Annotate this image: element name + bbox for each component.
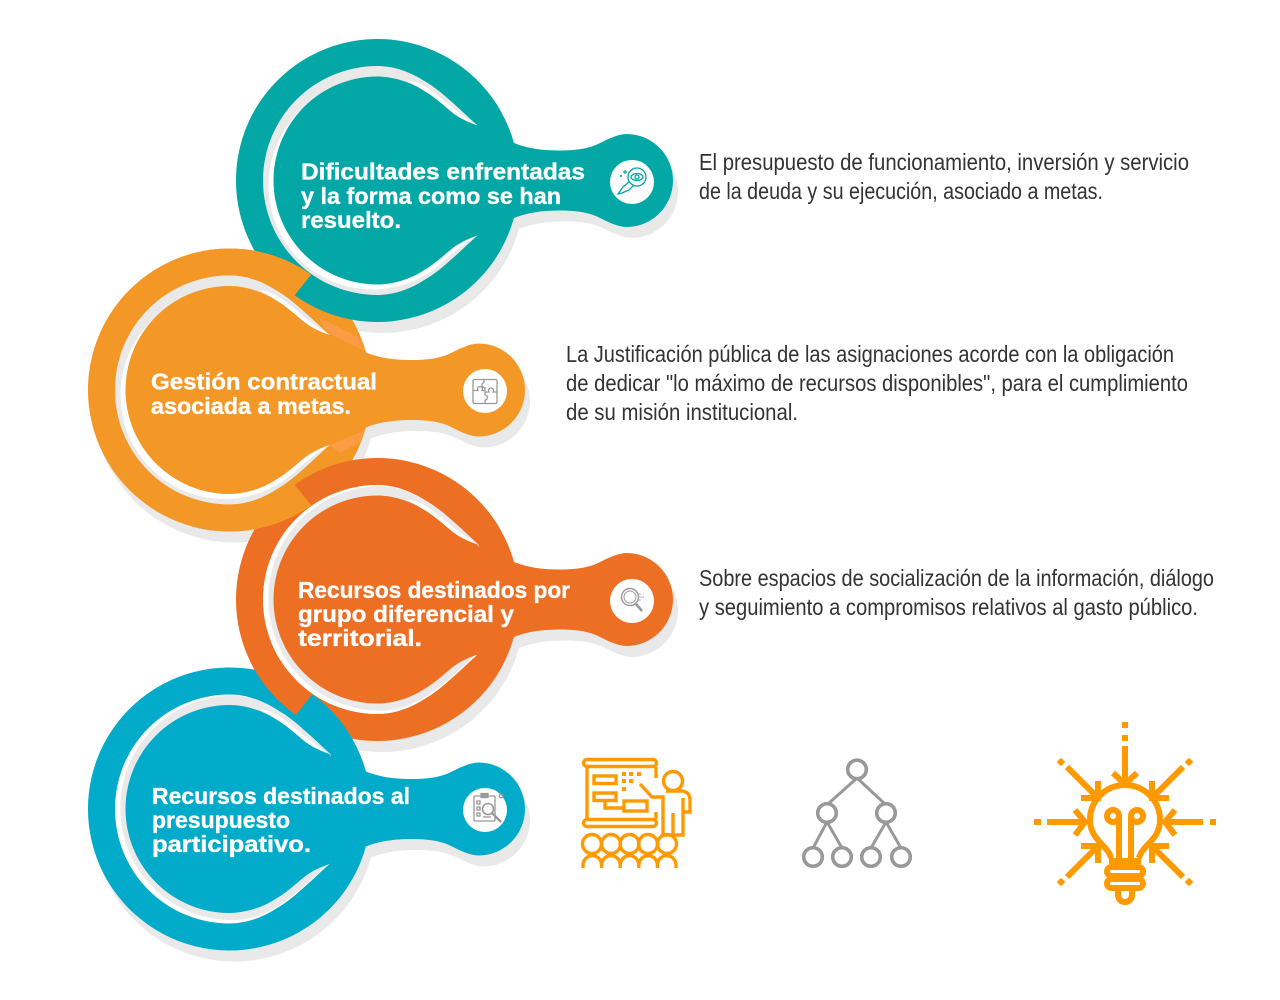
heading: recursos grupo diferencial: territorial. — [298, 625, 422, 651]
panel: red-orange keyhole shape — [236, 458, 673, 741]
text block: presupuesto: El presupuesto de funcionamiento, inversión y servicio — [699, 149, 1189, 175]
icon: hierarchy tree — [804, 760, 910, 866]
icon: light bulb with rays — [1034, 722, 1216, 902]
panel: orange keyhole shape — [88, 248, 525, 532]
text block: presupuesto — [699, 149, 1189, 204]
heading: recursos presupuesto participativo: participativo. — [152, 831, 311, 857]
text block: justificacion publica: de su misión institucional. — [566, 399, 798, 425]
text block: justificacion publica: de dedicar "lo máximo de recursos disponibles", para el cumplimiento — [566, 370, 1188, 396]
panel: teal keyhole shape — [236, 39, 673, 322]
text block: espacios de socializacion: y seguimiento a compromisos relativos al gasto público. — [699, 594, 1198, 620]
light orange shadow slivers — [318, 317, 365, 453]
text block: justificacion publica: La Justificación pública de las asignaciones acorde con la obligación — [566, 341, 1174, 367]
icon: clipboard magnifier — [463, 788, 507, 832]
icon: puzzle — [463, 369, 507, 413]
icon: eye bottle — [610, 160, 654, 204]
heading: recursos presupuesto participativo: Recursos destinados al — [152, 783, 410, 809]
text block: presupuesto: de la deuda y su ejecución, asociado a metas. — [699, 178, 1103, 204]
teal inner ring and blob — [263, 66, 496, 295]
text block: espacios de socializacion — [699, 565, 1214, 620]
heading: recursos presupuesto participativo: presupuesto — [152, 807, 290, 833]
orange inner ring and blob — [115, 276, 348, 504]
panel: blue keyhole shape — [88, 668, 525, 950]
orange overlap wedge over red-orange — [190, 480, 311, 532]
heading: dificultades: y la forma como se han — [301, 183, 561, 209]
heading: recursos grupo diferencial: grupo diferencial y — [298, 601, 514, 627]
orange ring repeated above wedge — [115, 276, 348, 504]
heading: dificultades: resuelto. — [301, 207, 401, 233]
heading: dificultades — [301, 158, 585, 233]
heading: gestion contractual: asociada a metas. — [151, 393, 351, 419]
red-orange inner ring and blob — [263, 485, 496, 714]
heading: gestion contractual — [151, 368, 377, 419]
heading: dificultades: Dificultades enfrentadas — [301, 158, 585, 184]
heading: recursos grupo diferencial — [298, 577, 570, 651]
icon: magnifier — [610, 579, 654, 623]
text block: justificacion publica — [566, 341, 1188, 425]
drop shadows of the four keyhole shapes — [93, 50, 678, 962]
red-orange overlap wedge over blue — [250, 660, 313, 716]
icon: presenter with audience — [582, 760, 690, 868]
heading: recursos grupo diferencial: Recursos destinados por — [298, 577, 570, 603]
red-orange ring repeated above wedge — [263, 485, 496, 714]
blue inner ring and blob — [115, 694, 348, 924]
text block: espacios de socializacion: Sobre espacios de socialización de la información, diálogo — [699, 565, 1214, 591]
heading: gestion contractual: Gestión contractual — [151, 368, 377, 394]
heading: recursos presupuesto participativo — [152, 783, 410, 857]
orange overlap wedge over teal — [190, 248, 312, 296]
